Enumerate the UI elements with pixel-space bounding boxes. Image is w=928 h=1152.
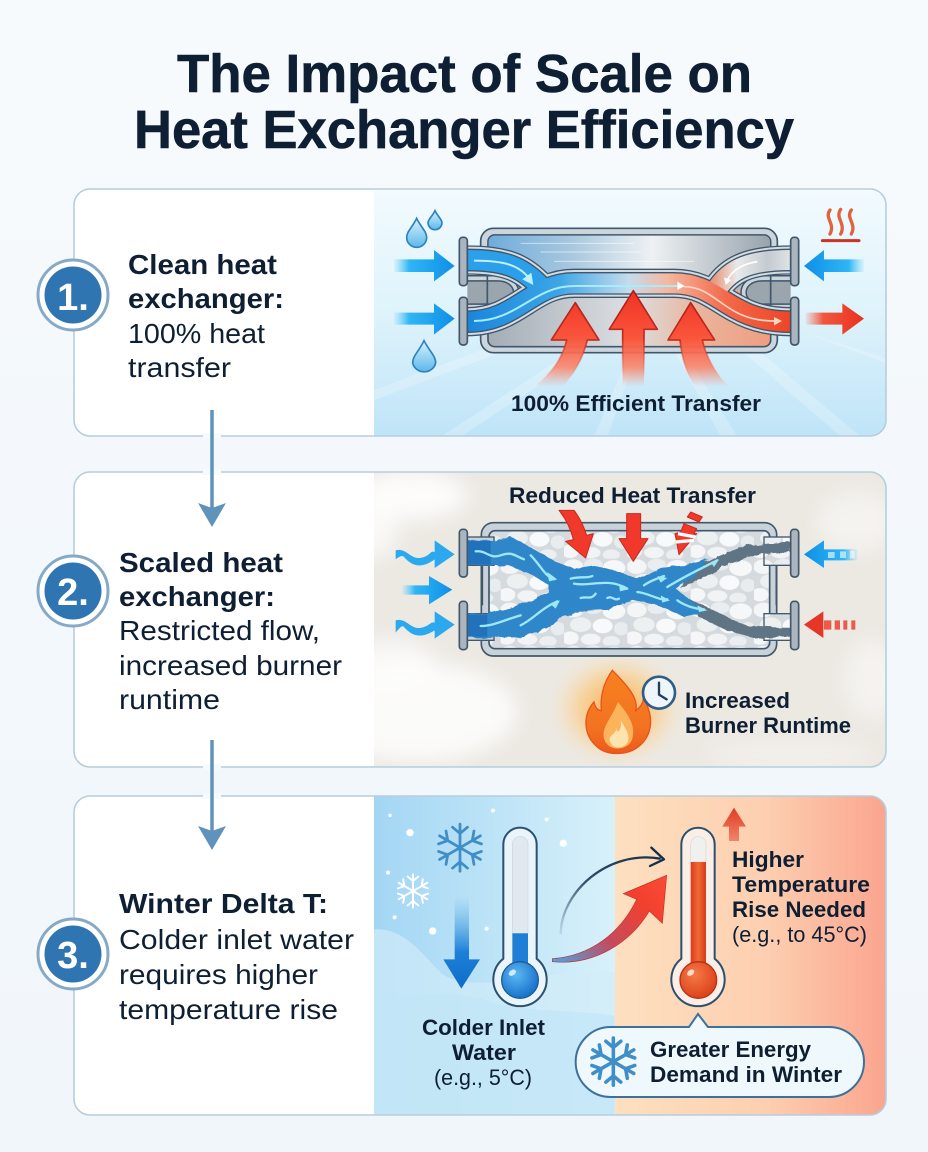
panel: scaled heat exchanger bbox=[74, 470, 904, 772]
label: higher temperature: Temperature bbox=[732, 872, 870, 897]
label: colder inlet water bbox=[422, 1015, 546, 1090]
badge 2 bbox=[38, 556, 108, 626]
text: step 1: exchanger: bbox=[128, 283, 284, 314]
flame icon bbox=[586, 670, 651, 753]
label: increased burner runtime bbox=[685, 688, 851, 738]
label: increased burner runtime: Increased bbox=[685, 688, 790, 713]
inlet arrows bbox=[396, 540, 857, 639]
clock icon bbox=[643, 677, 675, 709]
text: step 3: requires higher bbox=[119, 959, 318, 990]
icon: blue snowflake bbox=[436, 824, 484, 871]
up arrow bbox=[722, 808, 746, 841]
arrow: step 2 to 3 bbox=[198, 740, 226, 850]
label: higher temperature: Rise Needed bbox=[732, 897, 866, 922]
cold down arrow bbox=[443, 896, 480, 989]
water inlet arrows bbox=[394, 250, 864, 335]
label: higher temperature: Higher bbox=[732, 847, 804, 872]
title: The Impact of Scale on bbox=[177, 44, 752, 104]
text: step 2: increased burner bbox=[119, 650, 342, 681]
icon: white snowflake bbox=[396, 874, 430, 908]
label: colder inlet water: Colder Inlet bbox=[422, 1015, 546, 1040]
reduced heat arrows bbox=[559, 510, 702, 561]
text: step 3: Colder inlet water bbox=[119, 924, 354, 955]
panel: winter delta T bbox=[74, 796, 888, 1116]
panel border bbox=[74, 472, 886, 767]
label: greater energy demand: Demand in Winter bbox=[650, 1062, 842, 1087]
panel: clean heat exchanger bbox=[74, 189, 888, 437]
flow streaks bbox=[476, 551, 717, 626]
red swoosh arrow bbox=[552, 875, 667, 962]
label: greater energy demand: Greater Energy bbox=[650, 1037, 812, 1062]
panel border bbox=[74, 189, 886, 436]
text: step 2: runtime bbox=[119, 684, 220, 715]
arrow: step 1 to 2 bbox=[198, 410, 226, 527]
flanges bbox=[459, 237, 799, 345]
text: step 2: Restricted flow, bbox=[119, 615, 320, 646]
snow hills bbox=[374, 929, 615, 1116]
label: greater energy demand bbox=[650, 1037, 842, 1087]
flanges bbox=[459, 529, 799, 650]
hot thermometer bbox=[671, 828, 725, 1006]
label: higher temperature: (e.g., to 45°C) bbox=[732, 922, 867, 947]
water drops bbox=[407, 211, 442, 372]
illustration: clean exchanger bbox=[374, 189, 888, 437]
text: step 3: Winter Delta T: bbox=[119, 888, 328, 919]
heat waves icon bbox=[822, 209, 859, 241]
icon: callout snowflake bbox=[589, 1038, 638, 1085]
label: colder inlet water: (e.g., 5°C) bbox=[434, 1065, 532, 1090]
cold thermometer bbox=[493, 828, 547, 1006]
text: step 1: 100% heat bbox=[128, 318, 265, 349]
badge 1 bbox=[38, 260, 108, 330]
label: increased burner runtime: Burner Runtime bbox=[685, 713, 851, 738]
badge 3 bbox=[38, 919, 108, 989]
text: step 1: Clean heat bbox=[128, 249, 277, 280]
illustration: thermometers bbox=[374, 796, 888, 1116]
illustration: scaled exchanger bbox=[374, 472, 886, 766]
callout bubble bbox=[576, 1014, 864, 1097]
text: step 3 bbox=[119, 888, 354, 1025]
clouds bbox=[374, 473, 885, 764]
label: colder inlet water: Water bbox=[452, 1040, 516, 1065]
text: step 1 bbox=[128, 249, 284, 383]
exchanger body with scale bbox=[459, 523, 799, 656]
curved transition arrow bbox=[561, 848, 664, 934]
text: step 2: Scaled heat bbox=[119, 547, 283, 578]
badge 1: 1. bbox=[57, 277, 89, 319]
exchanger body bbox=[459, 228, 799, 353]
panel border bbox=[74, 796, 886, 1115]
title bbox=[134, 44, 794, 160]
text: step 2: exchanger: bbox=[119, 581, 275, 612]
text: step 1: transfer bbox=[128, 352, 231, 383]
badge 2: 2. bbox=[57, 572, 89, 614]
text: step 3: temperature rise bbox=[119, 994, 338, 1025]
title: Heat Exchanger Efficiency bbox=[134, 100, 794, 160]
heat arrows bbox=[534, 291, 729, 387]
label: reduced heat transfer: Reduced Heat Transfer bbox=[509, 483, 756, 508]
blue flow channel bbox=[468, 537, 791, 639]
badge 3: 3. bbox=[57, 935, 89, 977]
label: 100% efficient transfer: 100% Efficient Transfer bbox=[511, 391, 761, 416]
snow dots bbox=[386, 809, 567, 935]
text: step 2 bbox=[119, 547, 342, 715]
label: higher temperature bbox=[732, 847, 870, 947]
